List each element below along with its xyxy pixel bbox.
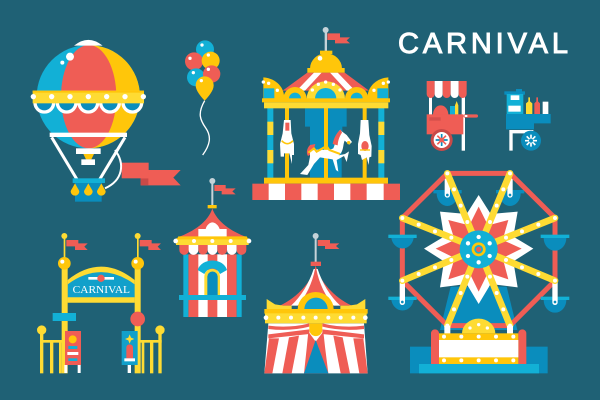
balloon scallops [35,93,142,112]
star [424,195,533,304]
big top tent [264,233,368,373]
cart poles [429,94,465,151]
gate flags [61,233,161,259]
cart body [427,114,478,134]
right poster [122,331,138,373]
cart wheel [431,129,453,151]
balloons [185,40,220,101]
red round lamp [130,312,145,326]
carousel base [252,178,400,200]
octagon rim [402,173,555,326]
left poster [64,331,81,373]
gate posts [58,257,144,373]
spokes [402,173,555,326]
carousel pillars [267,107,384,178]
tower roof [178,205,247,237]
big top drapes and walls [264,323,368,373]
title: CARNIVAL [398,28,568,60]
basket [71,178,106,202]
top gondolas [433,173,524,206]
ribbon [105,150,181,188]
gate sign [68,267,135,303]
entrance gate [37,233,165,373]
hot dog cart bottles [526,97,548,115]
carousel roof [283,51,369,91]
carousel arches [262,77,390,108]
hot dog cart body [506,114,551,151]
tower band [173,236,251,245]
string [200,101,209,155]
hot dog cart box [504,89,525,115]
tower body [183,254,242,317]
carousel left horse [280,120,294,164]
carousel [252,27,400,200]
tower flag [209,178,236,206]
carousel right horse [358,120,372,165]
tower balcony [179,295,246,300]
cart food [433,101,458,115]
spoke lights [400,171,557,328]
middle and bottom gondolas [388,235,569,313]
ferris wheel base [410,319,548,373]
big top crown [264,292,368,336]
ropes [51,134,126,180]
burner [76,148,101,165]
hub [460,230,498,268]
balloon band [31,91,146,103]
hot dog cart wheel [521,131,541,151]
ferris wheel [388,171,569,373]
balloon bunch [185,40,220,155]
cart awning [427,81,467,98]
balloon envelope [37,40,140,148]
left fence [37,325,63,373]
big top flag [313,233,339,263]
blue hanging plate [53,313,76,321]
popcorn cart [427,81,478,151]
ferris wheel back tower [440,287,517,330]
tower scallops [179,244,246,255]
hot air balloon [31,40,181,202]
tower door [198,260,227,296]
hot dog cart [504,89,551,151]
big top roof [280,262,352,306]
carousel centre horse [300,129,352,175]
gate sign: CARNIVAL [73,285,130,296]
carousel flag [323,27,350,51]
right fence [140,325,165,373]
striped tower tent [173,178,251,317]
